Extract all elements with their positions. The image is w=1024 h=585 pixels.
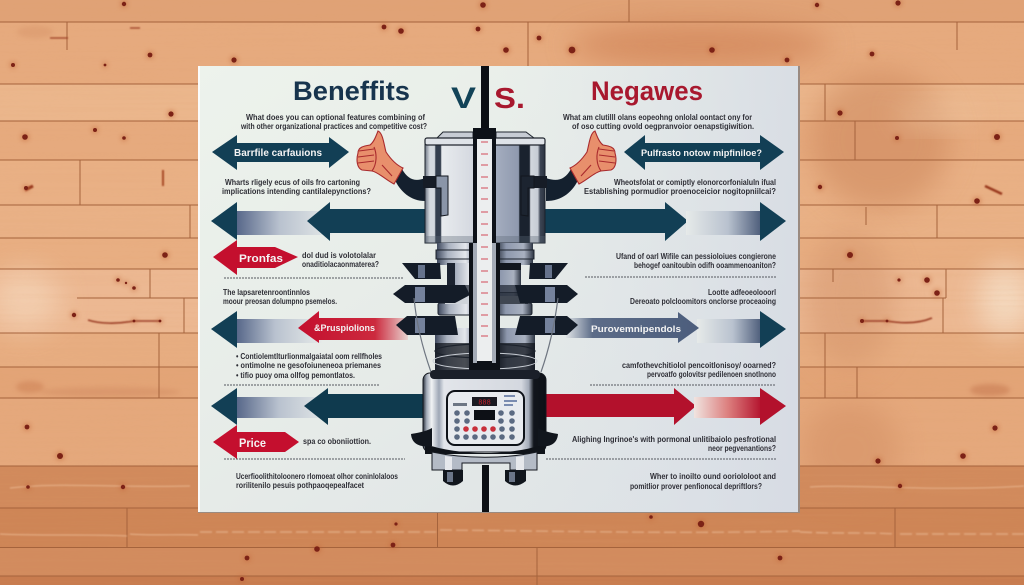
arrow: left row 3 fade and red label: &Pruspiolions bbox=[314, 323, 375, 333]
heading: versus: S. bbox=[494, 83, 525, 115]
arrow: right row 4 red bbox=[540, 388, 786, 425]
left column text blocks: rorilitenilo pesuis pothpaoqepealfacet bbox=[236, 481, 364, 490]
cooker side brackets bbox=[393, 263, 578, 335]
left column text blocks: The lapsaretenroontinnlos bbox=[223, 288, 310, 297]
left column text blocks: with other organizational practices and competitive cost? bbox=[240, 122, 427, 131]
right column text blocks: pomitlior prover penfionocal depriftlors? bbox=[630, 482, 762, 491]
right column text blocks: Establishing pormudior proenoceicior nogitopniilcai? bbox=[584, 187, 776, 196]
right column text blocks: Dereoato polcloomitors onclorse proceaoing bbox=[630, 297, 776, 306]
right column text blocks: Lootte adfeoeolooorl bbox=[708, 288, 776, 297]
arrow: red pronfas label bbox=[213, 240, 298, 275]
left column text blocks: moour preosan dolumpno psemelos. bbox=[223, 297, 337, 306]
left column text blocks: • tifio puoy oma ollfog pemontlatos. bbox=[236, 371, 355, 380]
heading: negatives: Negawes bbox=[591, 76, 703, 106]
center divider line bbox=[481, 66, 489, 512]
cooker center gauge bbox=[469, 128, 500, 378]
right column text blocks bbox=[563, 113, 776, 491]
right column text blocks: Wheotsfolat or comiptly elonorcorfonialuln ifual bbox=[614, 178, 776, 187]
cooker feet bbox=[443, 470, 526, 486]
right column text blocks: camfothevchitiolol pencoitlonisoy/ ooarned? bbox=[622, 361, 776, 370]
hand: right thumbs up bbox=[546, 131, 616, 201]
pressure cooker illustration bbox=[393, 128, 578, 486]
left column text blocks: What does you can optional features combining of bbox=[246, 113, 425, 122]
poster panel bbox=[198, 66, 800, 513]
heading: versus bbox=[451, 82, 525, 115]
arrow: left row 3 fade and red label bbox=[211, 311, 408, 348]
right column text blocks: neor pegvenantions? bbox=[708, 444, 776, 453]
right column text blocks: behogef oanitoubin odifh ooammenoaniton? bbox=[634, 261, 776, 270]
arrow: red pronfas label: Pronfas bbox=[239, 253, 283, 265]
left column text blocks: onaditiolacaonmaterea? bbox=[302, 260, 379, 269]
cooker upper pot bbox=[425, 132, 545, 243]
arrow: right row 3 slate label: Purovemnipendols bbox=[591, 324, 681, 335]
right column text blocks: pervoatfo golovitsr pedilenoen snotlnono bbox=[647, 370, 776, 379]
cooker side handles bbox=[411, 428, 558, 446]
right column text blocks: What am clutilll olans eopeohng onlolal oontact ony for bbox=[563, 113, 752, 122]
arrow: left double teal with label: Barrfile carfauions bbox=[234, 148, 322, 159]
arrow: left double teal with label bbox=[212, 135, 349, 170]
left column text blocks: spa co oboniiottion. bbox=[303, 437, 371, 446]
left column text blocks: Ucerfioolithitoloonero rlomoeat olhor coninlolaloos bbox=[236, 472, 398, 481]
left column text blocks bbox=[222, 113, 427, 490]
cooker wire bails bbox=[414, 298, 558, 372]
arrow: red price label: Price bbox=[239, 438, 266, 450]
left column text blocks: dol dud is volotolalar bbox=[302, 251, 376, 260]
arrow: right double teal with label bbox=[624, 135, 784, 170]
arrow: left row 4 fade bbox=[211, 388, 426, 425]
cooker control panel: 888 bbox=[478, 400, 491, 408]
arrow: red price label bbox=[213, 425, 299, 459]
cooker pot handles bbox=[423, 176, 547, 216]
cooker control panel bbox=[447, 391, 524, 445]
left column text blocks: implications intending cantilalepynctions? bbox=[222, 187, 371, 196]
left column text blocks: • Contiolemtlturlionmalgaiatal oom rellfholes bbox=[236, 352, 382, 361]
left column text blocks: Wharts rligely ecus of oils fro cartoning bbox=[225, 178, 360, 187]
arrow: right row 3 slate label bbox=[566, 311, 786, 348]
heading: benefits: Beneffits bbox=[293, 76, 410, 106]
cooker base body bbox=[423, 370, 546, 470]
right column text blocks: Alighing Ingrinoe's with pormonal unlitibaiolo pesfrotional bbox=[572, 435, 776, 444]
arrow: right row 2 fade bbox=[540, 202, 786, 241]
left column text blocks: • ontimolne ne gesofoiuneneoa priemanes bbox=[236, 361, 381, 370]
arrow: right double teal with label: Pulfrasto notow mipfiniloe? bbox=[641, 148, 762, 159]
heading: versus: V bbox=[451, 82, 476, 115]
dotted dividers bbox=[224, 277, 776, 459]
hand: left thumbs up bbox=[357, 131, 425, 201]
right column text blocks: Ufand of oarl Wifile can pessioloiues congierone bbox=[616, 252, 776, 261]
right column text blocks: Wher to inoilto ound ooriololoot and bbox=[650, 472, 776, 481]
cooker stacked neck sections bbox=[433, 243, 537, 374]
right column text blocks: of oso cutting ovold oegpranvoior oenapstigiwition. bbox=[572, 122, 754, 131]
arrow: left row 2 fade bbox=[211, 202, 426, 241]
